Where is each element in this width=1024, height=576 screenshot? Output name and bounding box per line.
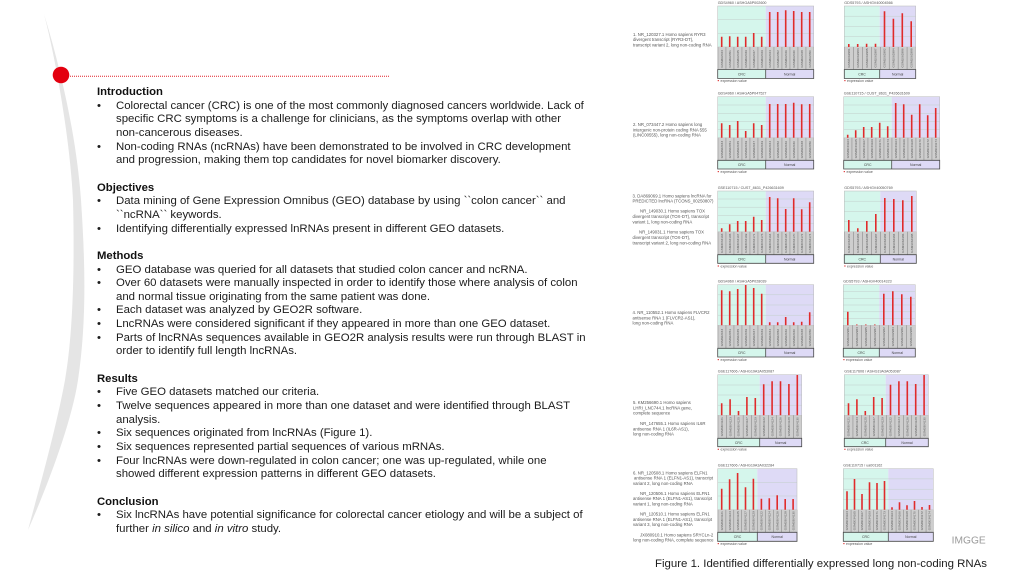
chart: DA869069.1 GDS5793: GSM1062983 (856, 233, 860, 253)
transcript description 5: NR_147655.1 Homo sapiens IL6R (640, 421, 705, 426)
chart: NR_073447.2 GDS4960: GSM362040 (792, 141, 796, 158)
transcript description 3: variant 1, long non-coding RNA (632, 219, 692, 224)
chart: NR_110552.1 GDS5793: GSM1062981 (846, 327, 850, 346)
chart: DA869069.1 GSE110715: GSM3034163 (720, 233, 724, 253)
section: methods: • (97, 304, 101, 316)
section: methods: Parts of lncRNAs sequences available in GEO2R analysis results were run through BLAST in (116, 332, 586, 344)
chart: DA869069.1 GSE110715: CRC (738, 257, 746, 261)
chart: KM256690.1 GSE117606 right: Normal (901, 441, 913, 445)
chart: KM256690.1 GSE117606 right: GSM3304125 (864, 417, 868, 436)
chart: NR_120508.1 GSE110715: GSM3034174 (928, 511, 932, 530)
chart: NR_073447.2 GSE110715: GSM3034172 (926, 139, 930, 158)
main text column (97, 86, 586, 535)
chart: NR_120508.1 GSE110715: GSM3034165 (853, 511, 857, 530)
section: methods: and normal tissue originating from the same patient was done. (116, 291, 430, 303)
section: objectives: • (97, 195, 101, 207)
chart: NR_120327.1 GDS4960 (718, 1, 814, 83)
section: introduction: • (97, 141, 101, 153)
figure caption: Figure 1. Identified differentially expressed long non-coding RNAs (655, 558, 987, 570)
chart: NR_110552.1 GDS5793: GSM1062983 (855, 327, 859, 346)
decorative grey crescent swoosh (28, 14, 84, 530)
chart: NR_110552.1 GDS4960: GSM362040 (792, 329, 796, 346)
chart: KM256690.1 GSE117606 left: GSM3304125 (737, 417, 741, 436)
transcript description 6: 6. NR_120508.1 Homo sapiens ELFN1 (633, 470, 708, 475)
section: conclusion (97, 496, 583, 535)
chart: NR_073447.2 GDS4960: GSM362046 (784, 141, 788, 158)
chart: DA869069.1 GSE110715: GSM3034169 (744, 233, 748, 253)
chart: NR_110552.1 GDS4960: GSM362050 (808, 329, 812, 346)
section: objectives: Data mining of Gene Expression Omnibus (GEO) database by using ``colon cancer`` and (116, 195, 566, 207)
chart: DA869069.1 GDS5793: GSM1062981 (847, 233, 851, 253)
chart: NR_120327.1 GDS4960: GSM362040 (792, 50, 796, 68)
chart: NR_110552.1 GDS4960: Normal (784, 351, 796, 355)
chart: DA869069.1 GDS5793: GSM1062987 (874, 233, 878, 253)
section: conclusion: Conclusion (97, 496, 159, 508)
transcript description 6: NR_120506.1 Homo sapiens ELFN1 (640, 491, 710, 496)
transcript description 3: NR_149031.1 Homo sapiens TOX (639, 230, 704, 235)
chart: NR_120327.1 GDS5793: GDS5793 / ASHGV40004566 (844, 1, 893, 5)
transcript description 3: 3. DA869069.1 Homo sapiens lncRNA for (632, 193, 712, 198)
section: introduction: • (97, 100, 101, 112)
section: results: • (97, 427, 101, 439)
transcript description 1: transcript variant 2, long non-coding RNA (633, 42, 712, 47)
chart: NR_120508.1 GSE117606: expression value (720, 542, 747, 546)
chart: NR_073447.2 GDS4960: GSM362039 (744, 141, 748, 158)
chart: KM256690.1 GSE117606 left: Normal (775, 441, 787, 445)
chart: KM256690.1 GSE117606 right (844, 370, 929, 452)
chart: NR_120508.1 GSE110715 (843, 464, 934, 546)
chart: NR_110552.1 GDS4960: GSM362051 (728, 329, 732, 346)
IMGGE logo wordmark: IMGGE (952, 536, 986, 547)
chart: NR_120327.1 GDS5793: GSM1062982 (883, 48, 887, 68)
section: results: Six sequences originated from lncRNAs (Figure 1). (116, 427, 372, 439)
section: methods: Methods (97, 250, 143, 262)
section: conclusion: further in silico and in vitro study. (116, 523, 281, 535)
transcript description 5: LHRI_LNC744.1 lncRNA gene, (633, 405, 692, 410)
chart: NR_120327.1 GDS4960: GDS4960 / ASHGA5P002600 (718, 1, 766, 5)
chart: NR_110552.1 GDS4960: GSM362048 (800, 329, 804, 346)
chart: NR_073447.2 GSE110715: GSM3034171 (878, 139, 882, 158)
section: methods: • (97, 318, 101, 330)
chart: NR_073447.2 GSE110715: GSM3034173 (886, 139, 890, 158)
section: objectives (97, 182, 566, 235)
transcript description 6: variant 3, long non-coding RNA (633, 522, 693, 527)
chart: NR_073447.2 GSE110715: GSM3034165 (854, 139, 858, 158)
transcript description 3: divergent transcript (TOX-DT), transcript (632, 214, 710, 219)
chart: NR_120327.1 GDS4960: GSM362051 (728, 50, 732, 68)
chart: NR_120327.1 GDS5793: CRC (858, 72, 866, 76)
chart: NR_120327.1 GDS4960: GSM362039 (744, 50, 748, 68)
chart: NR_120327.1 GDS4960: GSM362049 (760, 50, 764, 68)
transcript description 3: PREDICTED lncRNA (TCONS_00250807) (632, 198, 714, 203)
transcript description 5: antisense RNA 1 (IL6R-AS1), (633, 426, 689, 431)
section: objectives: • (97, 223, 101, 235)
chart: NR_120327.1 GDS5793: Normal (892, 72, 904, 76)
chart: KM256690.1 GSE117606 right: GSM3304130 (922, 417, 926, 436)
chart: NR_110552.1 GDS5793: GSM1062984 (891, 327, 895, 346)
chart: NR_073447.2 GDS4960: GSM362048 (800, 141, 804, 158)
chart: DA869069.1 GDS5793: GSM1062986 (901, 233, 905, 253)
chart: NR_073447.2 GSE110715 (844, 92, 940, 174)
chart: NR_120508.1 GSE110715: Normal (905, 535, 917, 539)
transcript description 6: long non-coding RNA, complete sequence (633, 538, 714, 543)
chart: KM256690.1 GSE117606 right: GSE117606 / ASHG19A3A053087 (844, 370, 901, 374)
chart: NR_120508.1 GSE117606: GSM3304126 (775, 511, 779, 530)
chart: NR_110552.1 GDS4960: GSM362043 (720, 329, 724, 346)
chart: NR_110552.1 GDS4960: GSM362049 (760, 329, 764, 346)
chart: NR_073447.2 GDS4960: GSM362049 (760, 141, 764, 158)
chart: NR_120508.1 GSE110715: GSM3034168 (905, 511, 909, 530)
chart: NR_073447.2 GDS4960: GSM362050 (808, 141, 812, 158)
transcript description 5: complete sequence (633, 411, 671, 416)
transcript description 6 (633, 470, 714, 543)
transcript description 1 (633, 32, 712, 47)
chart: NR_120508.1 GSE117606: GSE117606 / ASHG19A3A032284 (718, 464, 774, 468)
transcript description 4 (632, 310, 710, 325)
chart: NR_110552.1 GDS4960 (718, 280, 814, 362)
chart: NR_073447.2 GSE110715: GSE110715 / CUST_8631_P426631609 (844, 92, 910, 96)
header red circle marker (53, 67, 69, 83)
chart: DA869069.1 GSE110715: GSM3034166 (776, 233, 780, 253)
chart: DA869069.1 GDS5793: GSM1062984 (892, 233, 896, 253)
chart: NR_120327.1 GDS4960: GSM362043 (720, 50, 724, 68)
chart: DA869069.1 GSE110715: GSM3034165 (728, 233, 732, 253)
chart: NR_120327.1 GDS4960: GSM362048 (800, 50, 804, 68)
chart: DA869069.1 GSE110715: GSM3034171 (752, 233, 756, 253)
chart: NR_120508.1 GSE110715: GSM3034164 (890, 511, 894, 530)
chart: NR_073447.2 GDS4960: GSM362045 (736, 141, 740, 158)
chart: NR_120508.1 GSE110715: GSM3034173 (883, 511, 887, 530)
transcript description 6: JX080910.1 Homo sapiens SRYCLn-2 (640, 532, 714, 537)
chart: DA869069.1 GSE110715: expression value (720, 264, 747, 268)
chart: NR_073447.2 GSE110715: Normal (910, 163, 922, 167)
chart: NR_073447.2 GSE110715: GSM3034163 (846, 139, 850, 158)
chart: KM256690.1 GSE117606 left: GSM3304124 (770, 417, 774, 436)
chart: NR_120508.1 GSE117606: GSM3304123 (728, 511, 732, 530)
section: introduction: specific CRC symptoms is a challenge for clinicians, as the symptoms overlap with other (116, 113, 561, 125)
chart: NR_110552.1 GDS4960: CRC (738, 351, 746, 355)
section: introduction: Introduction (97, 86, 163, 98)
chart: KM256690.1 GSE117606 right: GSM3304121 (847, 417, 851, 436)
chart: NR_110552.1 GDS5793: CRC (858, 351, 866, 355)
section: introduction (97, 86, 584, 166)
chart: NR_120508.1 GSE110715: GSM3034170 (913, 511, 917, 530)
chart: NR_120508.1 GSE117606: CRC (734, 535, 742, 539)
chart: DA869069.1 GDS5793: expression value (847, 264, 873, 268)
chart: NR_110552.1 GDS4960: expression value (720, 358, 747, 362)
section: conclusion: • (97, 509, 101, 521)
chart: NR_120327.1 GDS4960: CRC (738, 72, 746, 76)
chart: NR_073447.2 GDS4960: GSM362052 (776, 141, 780, 158)
chart: NR_073447.2 GDS4960: GSM362044 (768, 141, 772, 158)
chart: NR_073447.2 GSE110715: GSM3034166 (902, 139, 906, 158)
chart: NR_120327.1 GDS4960: GSM362045 (736, 50, 740, 68)
chart: NR_120508.1 GSE117606: GSM3304130 (791, 511, 795, 530)
transcript description 2: 2. NR_073447.2 Homo sapiens long (633, 122, 703, 127)
section: results (97, 373, 570, 480)
chart: KM256690.1 GSE117606 left: GSM3304123 (728, 417, 732, 436)
header red dotted rule (70, 75, 389, 77)
section: introduction: Colorectal cancer (CRC) is one of the most commonly diagnosed cancers worldwide. Lack of (116, 100, 584, 112)
chart: NR_110552.1 GDS5793: GSM1062982 (882, 327, 886, 346)
chart: NR_120508.1 GSE110715: GSM3034163 (845, 511, 849, 530)
chart: NR_120508.1 GSE110715: CRC (862, 535, 870, 539)
chart: DA869069.1 GSE110715: GSM3034167 (736, 233, 740, 253)
chart: DA869069.1 GSE110715 (718, 186, 814, 268)
chart: NR_120508.1 GSE117606: GSM3304125 (736, 511, 740, 530)
chart: DA869069.1 GSE110715: GSM3034170 (792, 233, 796, 253)
transcript description 4: antisense RNA 1 (FLVCR2-AS1), (632, 315, 695, 320)
section: objectives: ``ncRNA`` keywords. (116, 209, 222, 221)
transcript description 6: antisense RNA 1 (ELFN1-AS1), transcript (633, 517, 713, 522)
chart: KM256690.1 GSE117606 right: GSM3304129 (880, 417, 884, 436)
transcript description 5 (633, 400, 705, 436)
section: methods: • (97, 332, 101, 344)
chart: NR_120508.1 GSE110715: GSM3034171 (875, 511, 879, 530)
chart: NR_120327.1 GDS5793: GSM1062988 (909, 48, 913, 68)
chart: NR_120327.1 GDS5793: GSM1062981 (847, 48, 851, 68)
chart: KM256690.1 GSE117606 left: GSM3304130 (796, 417, 800, 436)
chart: NR_120508.1 GSE117606 (718, 464, 797, 546)
chart: NR_110552.1 GDS4960: GDS4960 / ASHGA5P028039 (718, 280, 766, 284)
chart: DA869069.1 GSE110715: GSM3034173 (760, 233, 764, 253)
chart: NR_120508.1 GSE110715: GSM3034167 (860, 511, 864, 530)
section: methods: Over 60 datasets were manually inspected in order to identify those where analysis of colon (116, 277, 578, 289)
chart: NR_120327.1 GDS4960: GSM362050 (808, 50, 812, 68)
chart: NR_120327.1 GDS5793: GSM1062986 (900, 48, 904, 68)
chart: NR_073447.2 GSE110715: GSM3034174 (934, 139, 938, 158)
transcript description 3: divergent transcript (TOX-DT), (632, 235, 690, 240)
chart: NR_120508.1 GSE110715: expression value (846, 542, 872, 546)
chart: KM256690.1 GSE117606 left: GSM3304128 (787, 417, 791, 436)
chart: DA869069.1 GSE110715: GSM3034174 (808, 233, 812, 253)
section: objectives: Objectives (97, 182, 154, 194)
chart: NR_120327.1 GDS4960: GSM362046 (784, 50, 788, 68)
transcript description 6: antisense RNA 1 (ELFN1-AS1), transcript (634, 476, 714, 481)
chart: KM256690.1 GSE117606 left: GSM3304121 (720, 417, 724, 436)
chart: NR_120327.1 GDS5793: GSM1062987 (874, 48, 878, 68)
chart: KM256690.1 GSE117606 right: GSM3304123 (855, 417, 859, 436)
section: conclusion: Six lncRNAs have potential significance for colorectal cancer etiology and will be a subject of (116, 509, 583, 521)
chart: NR_073447.2 GSE110715: GSM3034167 (862, 139, 866, 158)
chart: NR_073447.2 GDS4960: GSM362047 (752, 141, 756, 158)
chart: NR_120327.1 GDS4960: GSM362044 (768, 50, 772, 68)
chart: NR_110552.1 GDS5793: Normal (892, 351, 903, 355)
chart: DA869069.1 GSE110715: Normal (784, 257, 796, 261)
section: methods: LncRNAs were considered significant if they appeared in more than one GEO dataset. (116, 318, 550, 330)
transcript description 5: long non-coding RNA (633, 431, 674, 436)
chart: NR_110552.1 GDS4960: GSM362044 (768, 329, 772, 346)
section: results: Four lncRNAs were down-regulated in colon cancer; one was up-regulated, while one (116, 455, 547, 467)
section: methods: • (97, 264, 101, 276)
chart: NR_073447.2 GDS4960: expression value (720, 170, 747, 174)
chart: NR_120508.1 GSE117606: GSM3304124 (768, 511, 772, 530)
chart: NR_073447.2 GSE110715: CRC (864, 163, 872, 167)
chart: NR_120508.1 GSE117606: GSM3304127 (744, 511, 748, 530)
chart: NR_110552.1 GDS5793: GSM1062986 (900, 327, 904, 346)
section: objectives: Identifying differentially expressed lnRNAs present in different GEO datasets. (116, 223, 504, 235)
chart: KM256690.1 GSE117606 right: GSM3304128 (914, 417, 918, 436)
transcript description 2: (LINC00555), long non-coding RNA (633, 133, 701, 138)
transcript description 1: 1. NR_120327.1 Homo sapiens RYR3 (633, 32, 706, 37)
chart: NR_110552.1 GDS4960: GSM362045 (736, 329, 740, 346)
chart: NR_073447.2 GDS4960: GSM362051 (728, 141, 732, 158)
chart: KM256690.1 GSE117606 right: CRC (861, 441, 869, 445)
transcript description 6: NR_120510.1 Homo sapiens ELFN1 (640, 512, 710, 517)
section: results: • (97, 455, 101, 467)
section: results: showed different expression patterns in different GEO datasets. (116, 468, 436, 480)
transcript description 6: variant 2, long non-coding RNA (633, 481, 693, 486)
chart: NR_073447.2 GDS4960 (718, 92, 814, 174)
chart: KM256690.1 GSE117606 left: GSM3304129 (754, 417, 758, 436)
chart: NR_120508.1 GSE117606: Normal (772, 535, 783, 539)
chart: NR_120327.1 GDS5793: GSM1062985 (865, 48, 869, 68)
chart: NR_120508.1 GSE117606: GSM3304121 (720, 511, 724, 530)
section: methods: GEO database was queried for all datasets that studied colon cancer and ncRNA. (116, 264, 528, 276)
chart: KM256690.1 GSE117606 right: GSM3304127 (872, 417, 876, 436)
transcript description 4: long non-coding RNA (632, 320, 673, 325)
chart: KM256690.1 GSE117606 left: GSE117606 / ASHG19A3A053087 (718, 370, 774, 374)
chart: NR_110552.1 GDS4960: GSM362052 (776, 329, 780, 346)
chart: DA869069.1 GDS5793: GSM1062988 (910, 233, 914, 253)
chart: KM256690.1 GSE117606 left: GSM3304122 (762, 417, 766, 436)
section: methods: order to identify full length lncRNAs. (116, 345, 297, 357)
section: methods (97, 250, 586, 357)
chart: NR_120508.1 GSE110715: GSE110715 / ua001162 (843, 464, 882, 468)
chart: NR_110552.1 GDS5793: GSM1062987 (873, 327, 877, 346)
transcript description 3 (632, 193, 714, 245)
chart: NR_110552.1 GDS5793 (843, 280, 916, 362)
chart: KM256690.1 GSE117606 right: GSM3304124 (897, 417, 901, 436)
chart: NR_120327.1 GDS4960: GSM362047 (752, 50, 756, 68)
chart: DA869069.1 GDS5793: GSM1062985 (865, 233, 869, 253)
section: results: • (97, 386, 101, 398)
chart: NR_073447.2 GDS4960: Normal (784, 163, 796, 167)
transcript description 2: intergenic non-protein coding RNA 555 (633, 127, 707, 132)
chart: NR_110552.1 GDS5793: GSM1062985 (864, 327, 868, 346)
chart: DA869069.1 GSE110715: GSM3034164 (768, 233, 772, 253)
chart: NR_120327.1 GDS5793: expression value (847, 79, 873, 83)
section: results: analysis. (116, 414, 160, 426)
section: methods: Each dataset was analyzed by GEO2R software. (116, 304, 362, 316)
chart: NR_120508.1 GSE110715: GSM3034172 (920, 511, 924, 530)
chart: NR_073447.2 GSE110715: GSM3034169 (870, 139, 874, 158)
chart: NR_073447.2 GDS4960: GDS4960 / ASHGA5P047527 (718, 92, 766, 96)
chart: NR_120508.1 GSE117606: GSM3304129 (752, 511, 756, 530)
chart: NR_073447.2 GDS4960: CRC (738, 163, 746, 167)
chart: KM256690.1 GSE117606 right: GSM3304126 (906, 417, 910, 436)
chart: NR_120327.1 GDS5793: GSM1062983 (856, 48, 860, 68)
chart: NR_073447.2 GSE110715: expression value (846, 170, 873, 174)
chart: NR_110552.1 GDS5793: expression value (846, 358, 872, 362)
transcript description 3: transcript variant 2, long non-coding RNA (632, 240, 711, 245)
transcript description 6: variant 1, long non-coding RNA (633, 501, 693, 506)
chart: KM256690.1 GSE117606 left (718, 370, 802, 452)
transcript description 3: NR_149030.1 Homo sapiens TOX (640, 209, 705, 214)
chart: KM256690.1 GSE117606 left: CRC (735, 441, 743, 445)
transcript description 1: divergent transcript (RYR3-DT), (633, 37, 693, 42)
chart: DA869069.1 GDS5793: CRC (859, 257, 867, 261)
section: introduction: Non-coding RNAs (ncRNAs) have been demonstrated to be involved in CRC development (116, 141, 571, 153)
chart: NR_120327.1 GDS5793 (844, 1, 916, 83)
section: introduction: non-cancerous diseases. (116, 127, 243, 139)
section: results: Results (97, 373, 138, 385)
chart: NR_073447.2 GSE110715: GSM3034170 (918, 139, 922, 158)
chart: NR_120508.1 GSE110715: GSM3034166 (898, 511, 902, 530)
chart: NR_110552.1 GDS5793: GDS5793 / ASHGV40014323 (843, 280, 892, 284)
section: results: Twelve sequences appeared in more than one dataset and were identified through BLAST (116, 400, 570, 412)
chart: KM256690.1 GSE117606 left: GSM3304127 (745, 417, 749, 436)
transcript description 6: antisense RNA 1 (ELFN1-AS1), transcript (633, 496, 713, 501)
section: methods: • (97, 277, 101, 289)
chart: NR_120508.1 GSE117606: GSM3304122 (760, 511, 764, 530)
chart: DA869069.1 GDS5793: Normal (893, 257, 904, 261)
chart: NR_120508.1 GSE110715: GSM3034169 (868, 511, 872, 530)
transcript description 5: 5. KM256690.1 Homo sapiens (633, 400, 691, 405)
chart: DA869069.1 GDS5793: GSM1062982 (883, 233, 887, 253)
chart: NR_110552.1 GDS4960: GSM362047 (752, 329, 756, 346)
chart: NR_073447.2 GSE110715: GSM3034168 (910, 139, 914, 158)
section: results: Five GEO datasets matched our criteria. (116, 386, 319, 398)
section: introduction: and progression, making them top candidates for novel biomarker discovery. (116, 154, 501, 166)
chart: KM256690.1 GSE117606 left: GSM3304126 (779, 417, 783, 436)
chart: NR_120327.1 GDS5793: GSM1062984 (892, 48, 896, 68)
chart: KM256690.1 GSE117606 right: GSM3304122 (889, 417, 893, 436)
chart: DA869069.1 GDS5793 (844, 186, 917, 268)
chart: NR_073447.2 GDS4960: GSM362043 (720, 141, 724, 158)
chart: DA869069.1 GSE110715: GSM3034172 (800, 233, 804, 253)
chart: NR_110552.1 GDS4960: GSM362046 (784, 329, 788, 346)
chart: DA869069.1 GDS5793: GDS5793 / ASHGV40050769 (844, 186, 893, 190)
chart: NR_120508.1 GSE117606: GSM3304128 (783, 511, 787, 530)
chart: NR_110552.1 GDS5793: GSM1062988 (909, 327, 913, 346)
chart: KM256690.1 GSE117606 left: expression value (720, 448, 747, 452)
section: results: • (97, 400, 101, 412)
section: results: Six sequences represented partial sequences of various mRNAs. (116, 441, 445, 453)
chart: NR_120327.1 GDS4960: Normal (784, 72, 796, 76)
chart: DA869069.1 GSE110715: GSM3034168 (784, 233, 788, 253)
transcript description 4: 4. NR_110552.1 Homo sapiens FLVCR2 (632, 310, 710, 315)
chart: NR_120327.1 GDS4960: expression value (720, 79, 747, 83)
chart: KM256690.1 GSE117606 right: expression value (847, 448, 873, 452)
chart: NR_073447.2 GSE110715: GSM3034164 (894, 139, 898, 158)
transcript description 2 (633, 122, 707, 138)
section: results: • (97, 441, 101, 453)
chart: NR_120327.1 GDS4960: GSM362052 (776, 50, 780, 68)
chart: DA869069.1 GSE110715: GSE110715 / CUST_8631_P426631609 (718, 186, 784, 190)
chart: NR_110552.1 GDS4960: GSM362039 (744, 329, 748, 346)
